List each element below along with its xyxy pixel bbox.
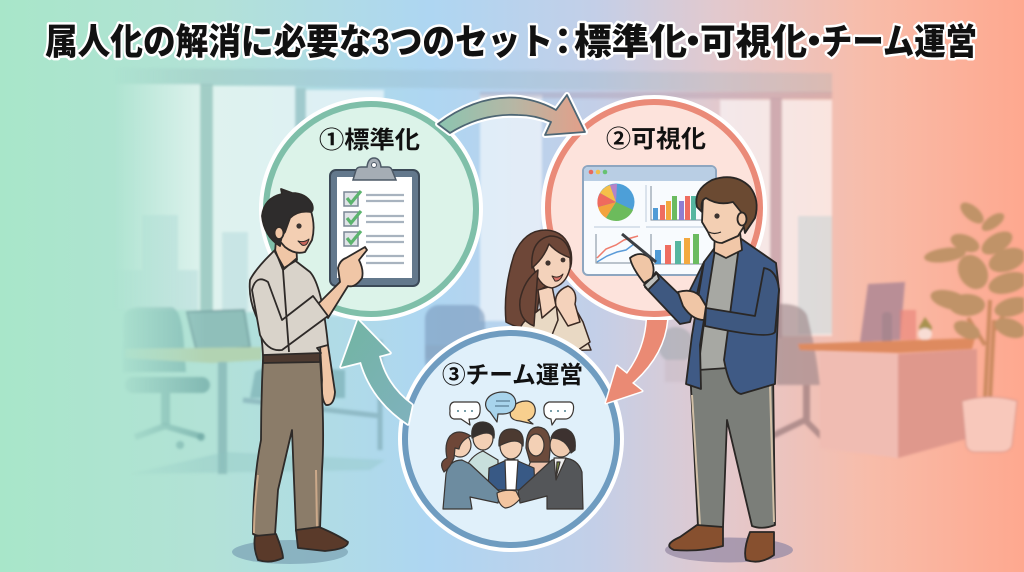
title: ・ [675,21,711,62]
right chair [770,304,822,437]
icon: clipboard checklist [330,158,419,286]
crossed arm [705,268,779,335]
window buildings [146,216,832,334]
title: チーム運営 [821,21,977,62]
right desk [798,282,977,458]
head [702,198,748,243]
panel: standardization circle [259,97,483,321]
shoes [254,534,283,562]
shoes [669,525,723,550]
line chart [596,234,640,263]
arrow: standardization to visualization [438,95,585,135]
right man [518,458,583,509]
potted plant [923,199,1024,452]
trousers [253,358,323,536]
trousers [690,368,775,528]
shadow [232,540,348,564]
heading: visualization: ②可視化 [606,126,706,153]
windows [112,84,832,336]
right window mullion [770,98,782,338]
pointing forearm and hand [318,247,367,318]
panel: visualization circle [541,95,767,321]
arrow: team to standardization [341,320,412,424]
icon: team handshake [442,392,583,509]
center person [488,458,535,490]
title: ： [545,21,581,62]
title: 可視化 [700,21,807,62]
title: 標準化 [574,21,687,62]
bar chart bottom [651,234,712,264]
jacket left panel [686,246,716,389]
crossed hand [678,291,706,320]
pen arm [645,262,704,324]
small plant behind [659,326,691,381]
arrow: visualization to team [606,320,667,403]
shadow [665,538,793,562]
speech bubbles [450,392,574,425]
pen [622,234,656,262]
shirt [250,250,328,355]
pie chart [597,184,634,221]
illustration: man in navy jacket with pen [622,177,793,562]
office scene backdrop [110,68,1024,474]
heading: team management: ③チーム運営 [442,362,583,389]
title [45,21,977,62]
ceiling beam [166,69,832,93]
head [275,208,314,253]
title: 属人化の解消に必要な3つのセット [45,21,553,62]
tee [698,252,740,370]
belt [263,351,320,363]
handshake [497,490,520,508]
jacket right panel [724,238,779,394]
window frames [200,84,306,314]
back row people [465,451,498,490]
pointing sleeve [252,279,328,350]
left desk and chair [123,305,505,474]
illustration: man in beige shirt pointing [232,189,367,564]
illustration: woman thinking [505,230,591,352]
bar chart top [651,186,712,220]
heading: standardization: ①標準化 [319,127,420,154]
title: ・ [796,21,832,62]
pen hand [630,254,654,283]
neck [714,232,742,258]
neck [275,240,297,268]
panel: team management circle [398,326,624,552]
icon: analytics dashboard [583,166,716,275]
left woman [443,460,500,509]
